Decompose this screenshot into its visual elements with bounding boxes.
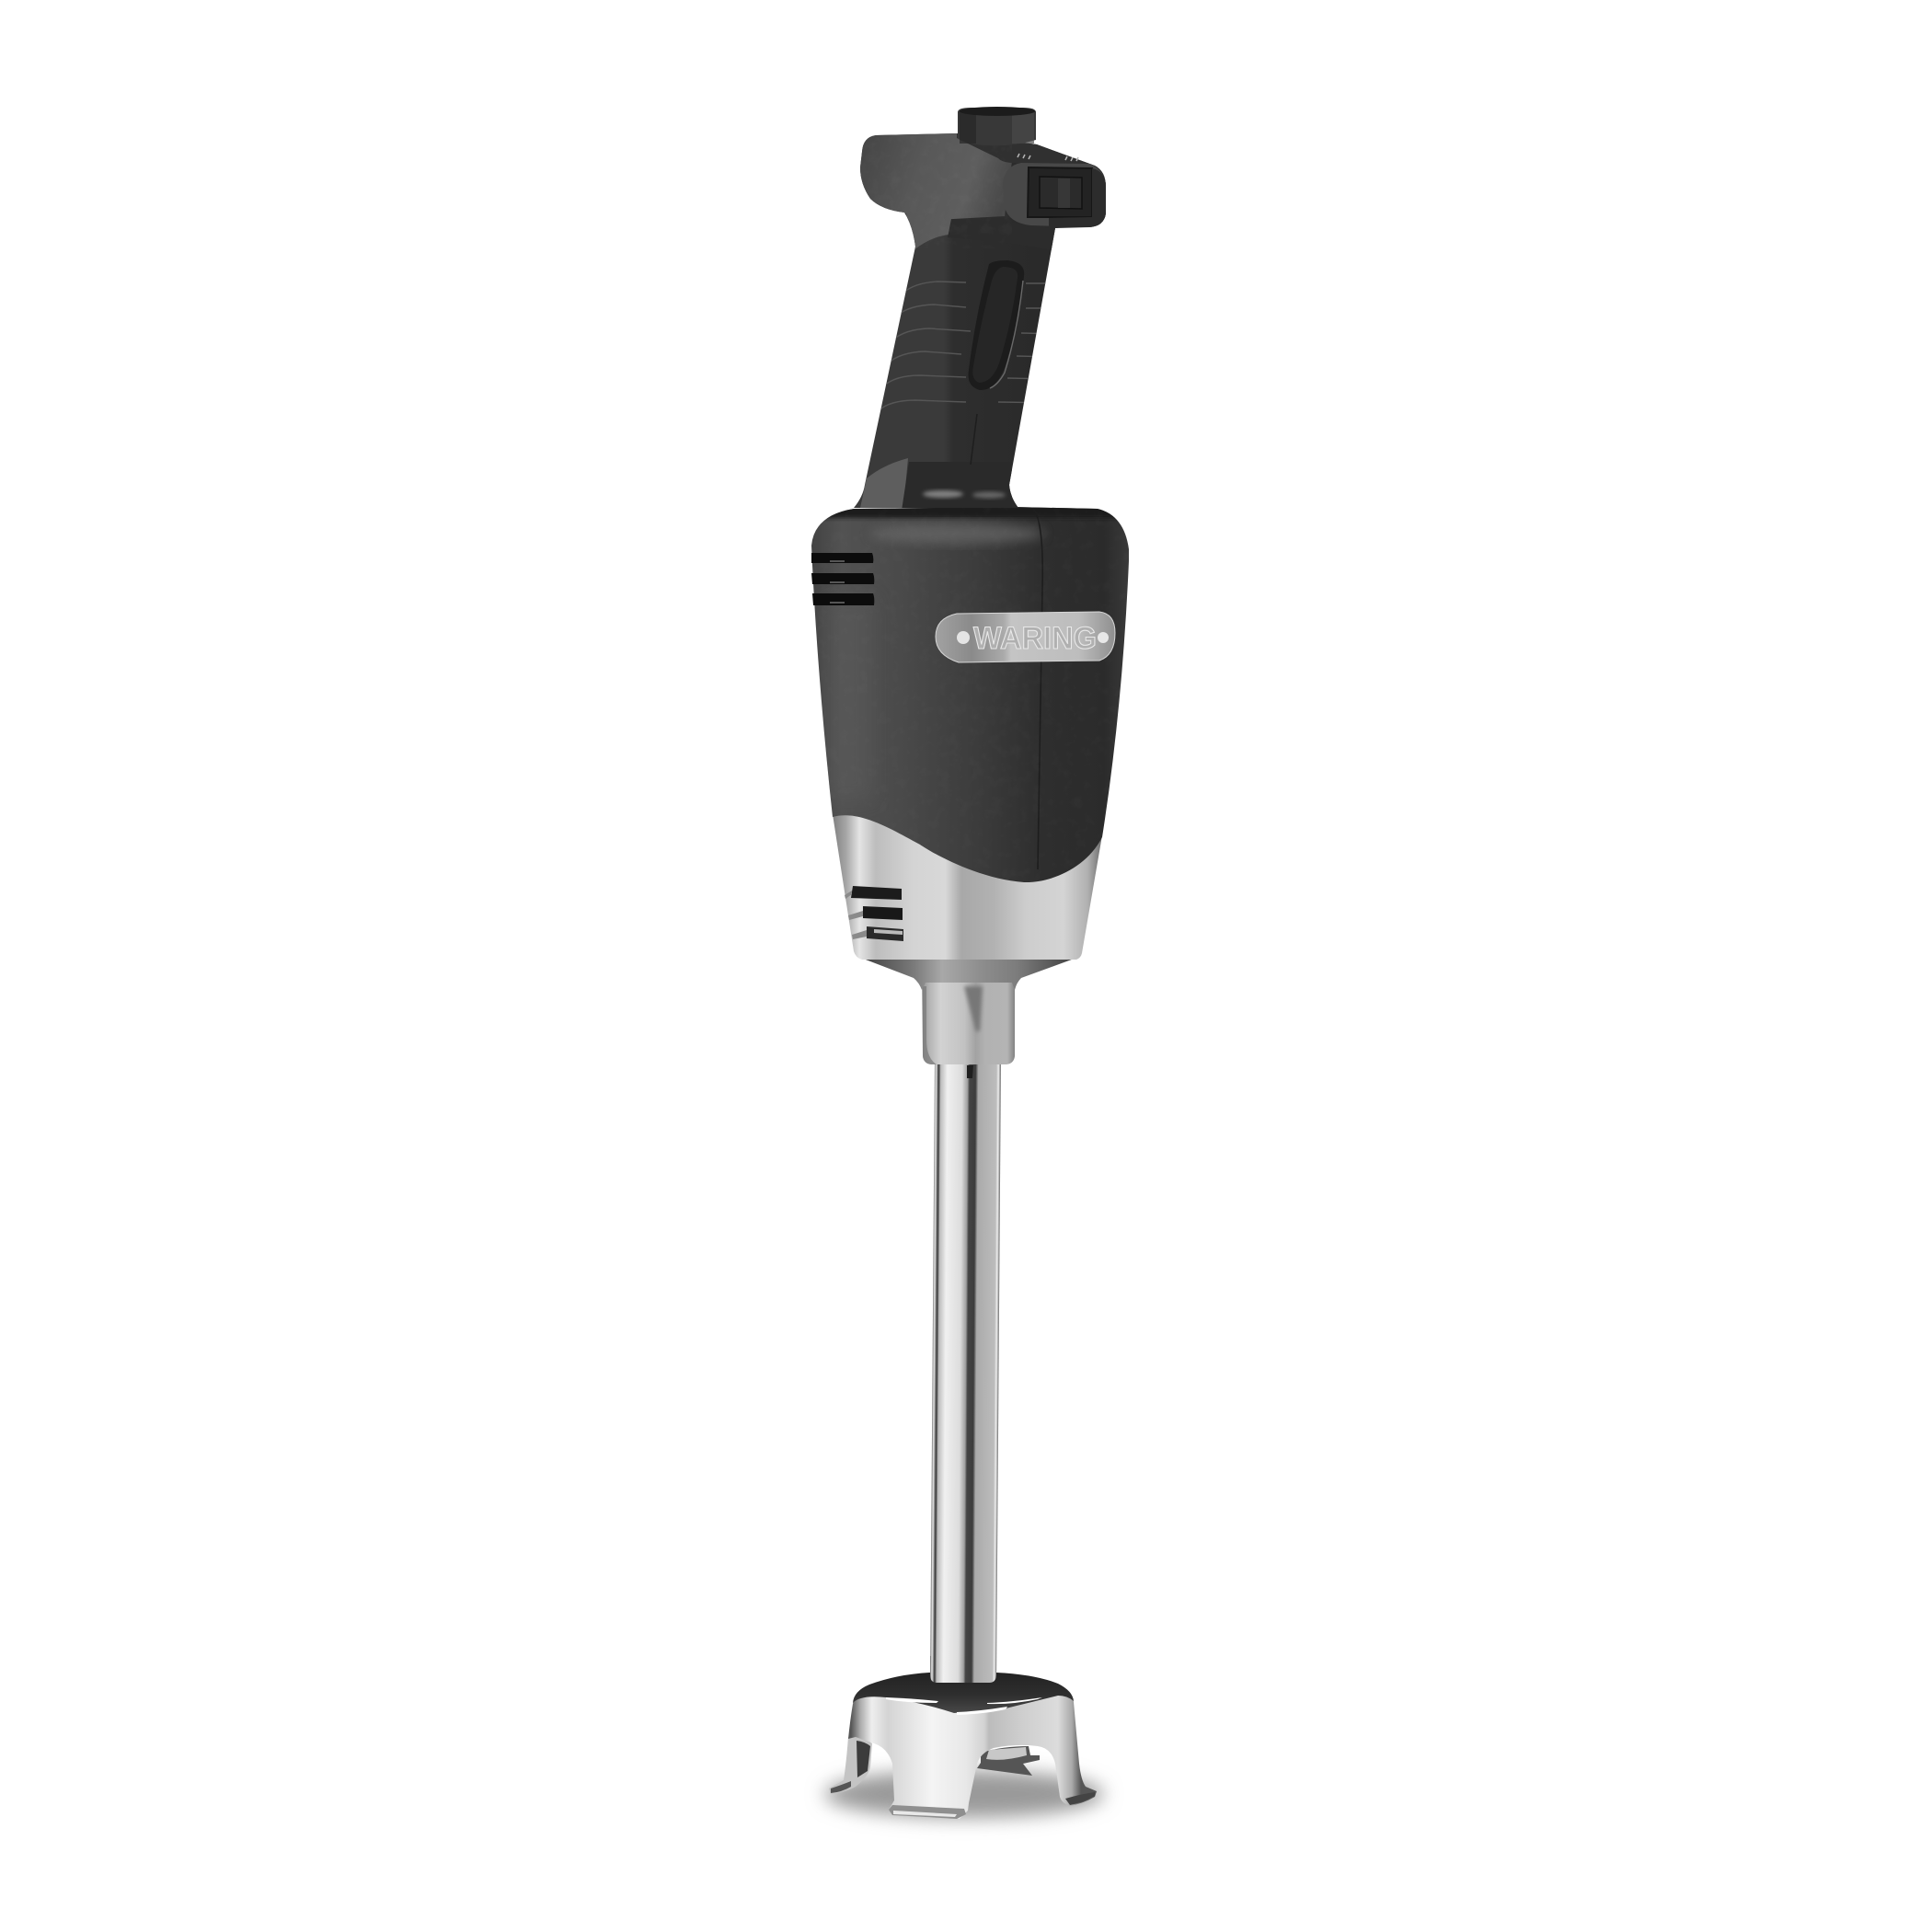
- grip ribs: [878, 282, 1058, 411]
- foot rim: [889, 1805, 966, 1819]
- lighter upper handle: [856, 129, 1012, 250]
- tiny speed markings: [1018, 154, 1078, 161]
- cord knob: [958, 107, 1036, 145]
- nameplate: [936, 612, 1115, 662]
- handle: [854, 107, 1106, 511]
- product illustration: immersion blender: [811, 107, 1129, 1831]
- texture: [856, 129, 1012, 248]
- lower vents: [845, 886, 903, 941]
- lower dark sleeve: [902, 462, 1012, 511]
- cap: [853, 1673, 1074, 1713]
- guard body: [848, 1687, 1097, 1819]
- right foot shine: [1065, 1792, 1095, 1805]
- upper vents: [811, 553, 874, 605]
- sleeve highlights: [923, 490, 963, 498]
- dark shade under the knob: [957, 133, 1104, 167]
- rivets: [957, 631, 970, 644]
- highlights on the guard: [886, 1697, 938, 1703]
- grip base shape: [854, 133, 1106, 508]
- blade guard foot and blade: [829, 1673, 1097, 1819]
- shadow under base: [824, 1770, 1104, 1818]
- blade: [977, 1746, 1040, 1776]
- motor housing: [810, 504, 1132, 990]
- grip slot button: [968, 260, 1024, 390]
- left soft light: [826, 751, 830, 793]
- texture: [810, 506, 1132, 883]
- black body: [811, 507, 1129, 882]
- top highlight: [869, 523, 1044, 544]
- back-left leg: [829, 1735, 872, 1794]
- shaft bottom collar over the guard: [930, 1656, 996, 1683]
- head end with rocker switch: [1003, 154, 1106, 227]
- seam line on grip: [971, 414, 977, 465]
- steel flare below housing: [858, 957, 1079, 990]
- top rim shade: [824, 507, 1117, 521]
- immersion shaft: [930, 1058, 1001, 1688]
- seam: [1037, 517, 1043, 869]
- lighter patch low left: [860, 458, 908, 508]
- dark band under head: [948, 219, 1058, 250]
- neck collar: [922, 975, 1015, 1078]
- logo: WARING: [973, 621, 1097, 656]
- steel lower housing: [833, 814, 1102, 960]
